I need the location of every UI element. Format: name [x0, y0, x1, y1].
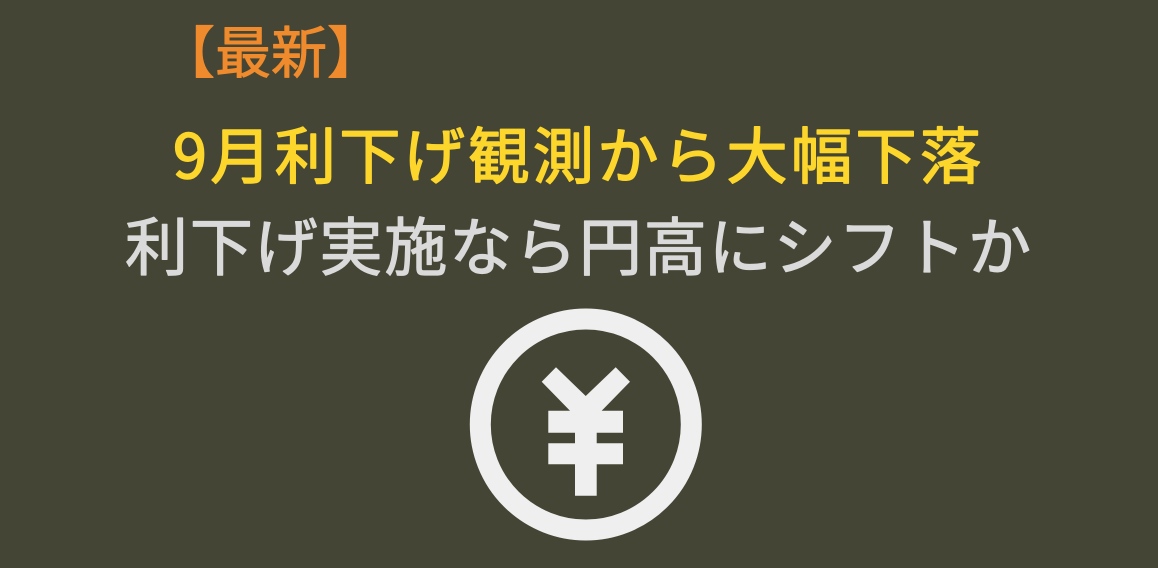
label: 最新 tag: 【最新】 — [159, 9, 383, 90]
subheadline: light grey line: 利下げ実施なら円高にシフトか — [125, 198, 1031, 289]
headline: yellow line: 9月利下げ観測から大幅下落 — [173, 107, 981, 196]
icon: yen coin — [480, 319, 691, 530]
